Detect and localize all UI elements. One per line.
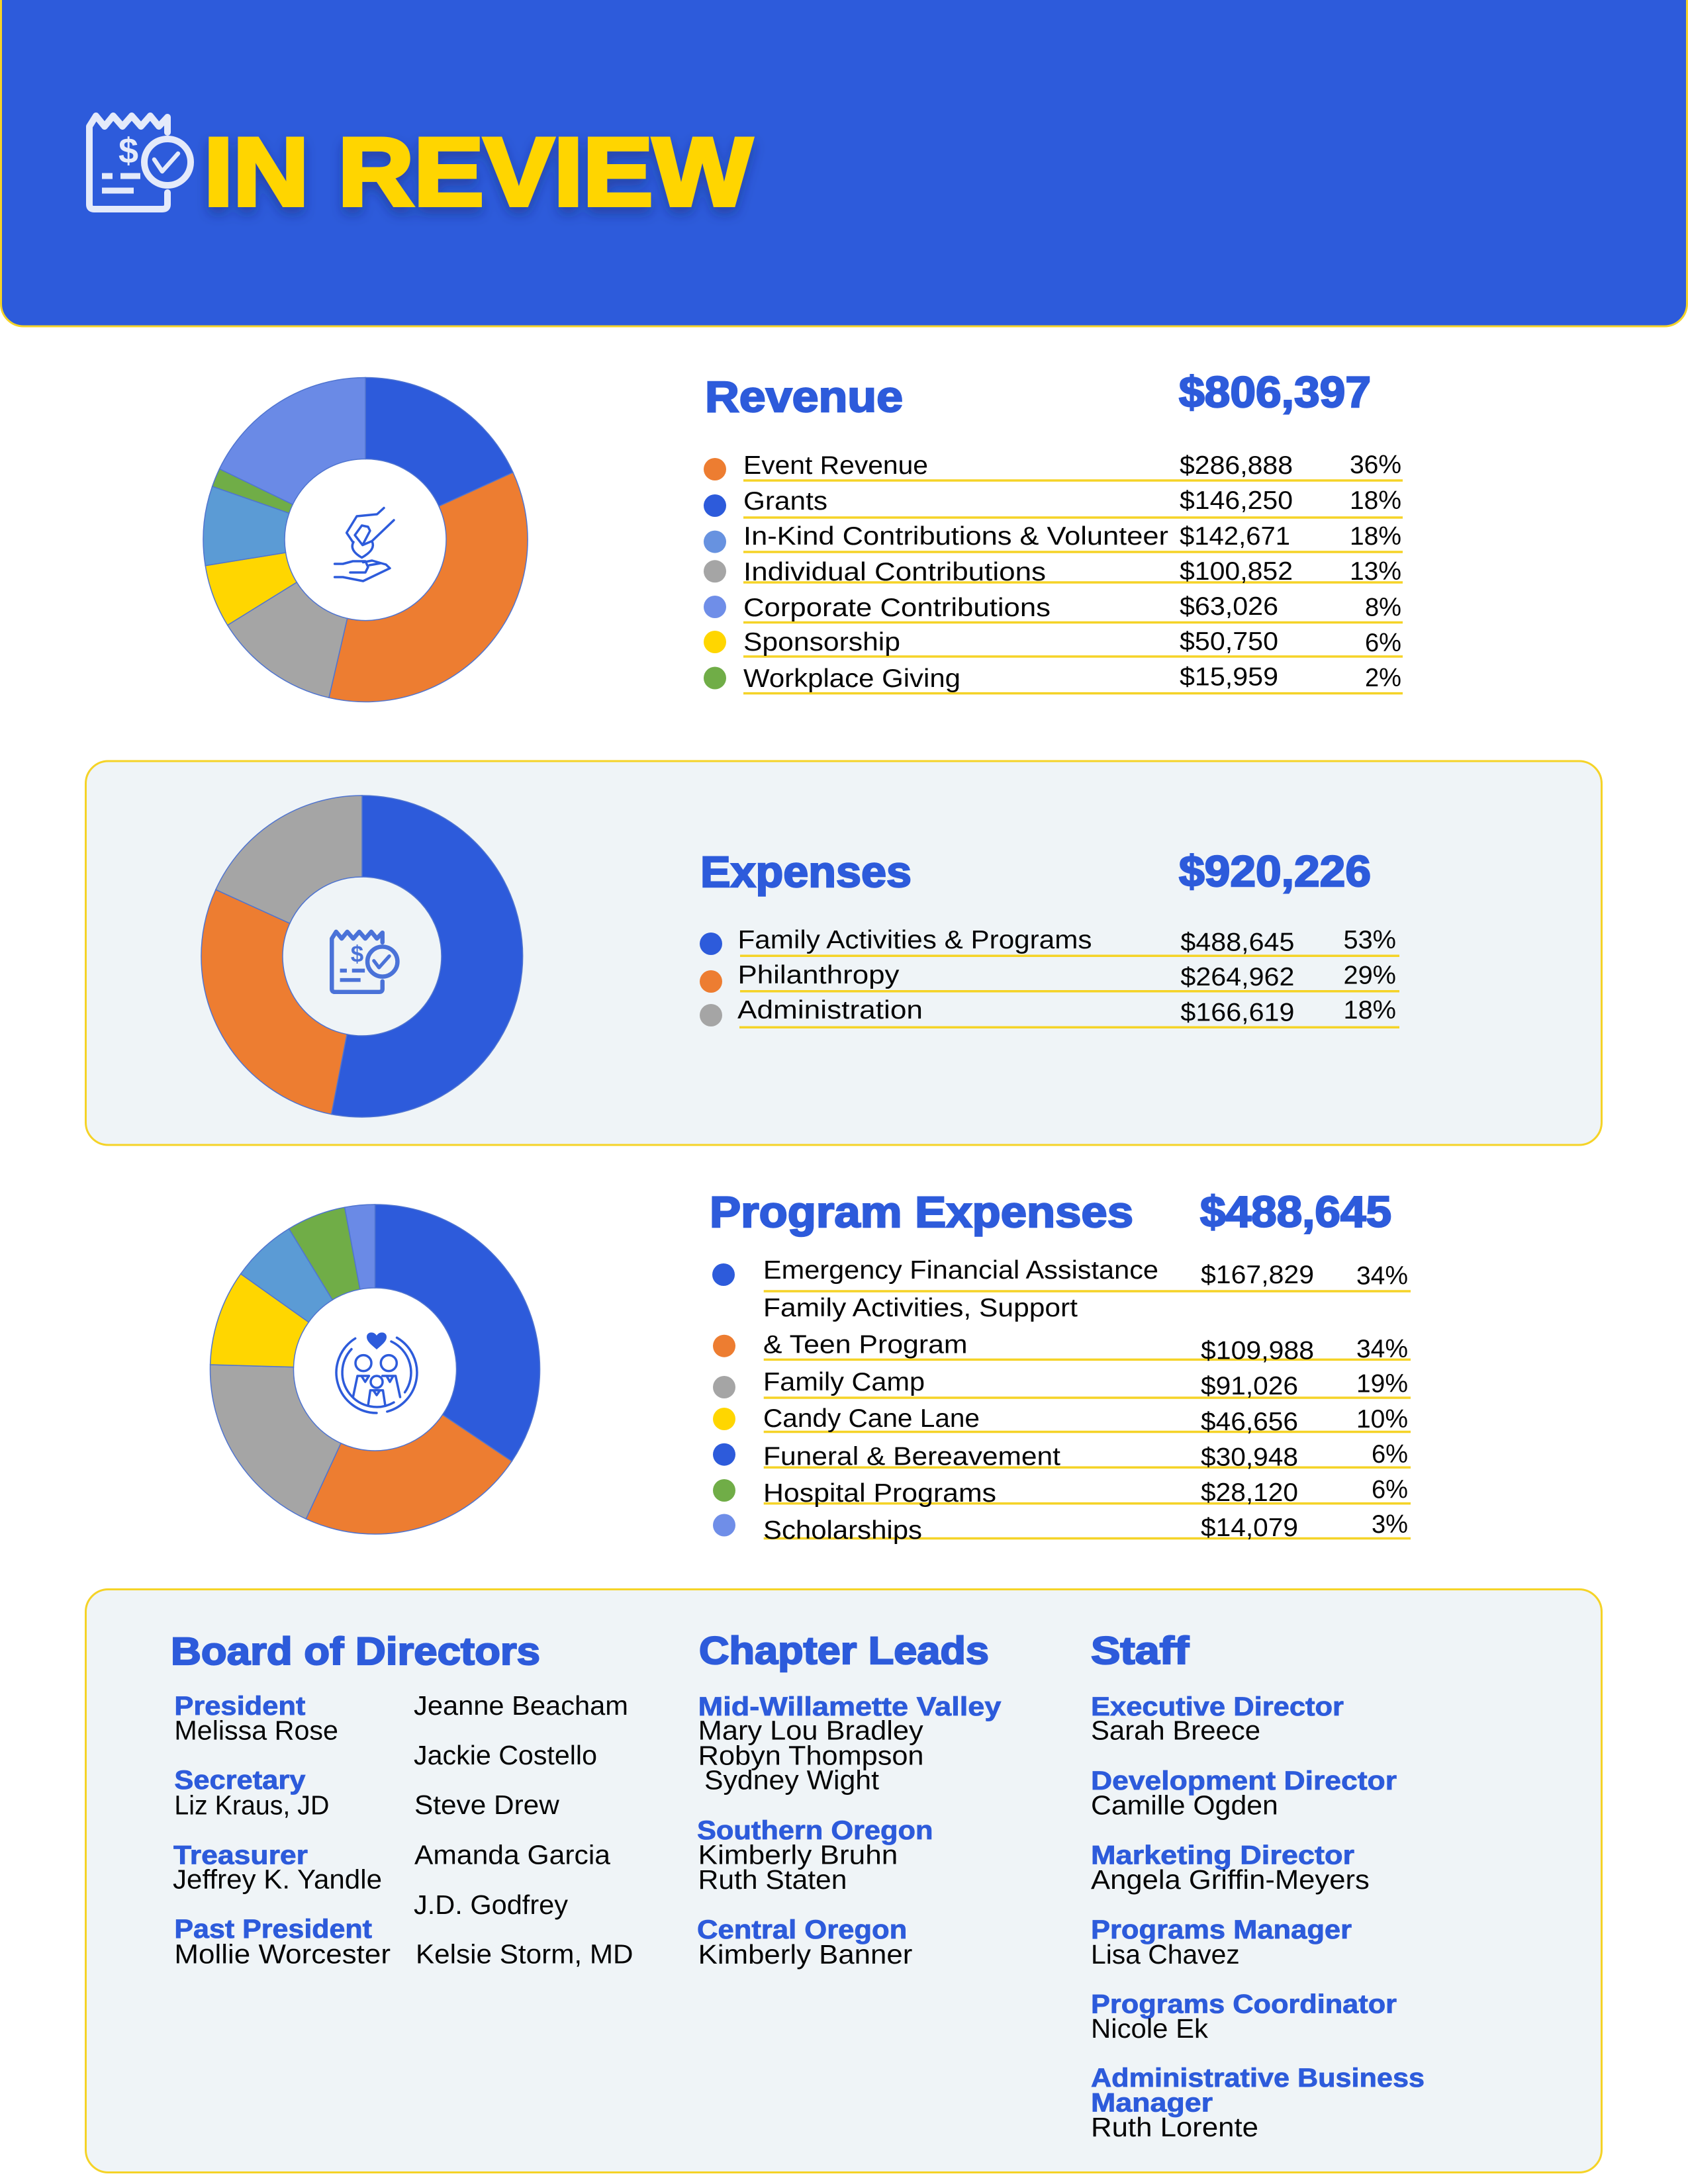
row: Grants: 18% <box>1350 486 1401 515</box>
staff: Programs Coordinator <box>1091 1990 1397 2044</box>
officer: President: Melissa Rose <box>174 1715 338 1746</box>
panel: expenses <box>86 761 1602 1145</box>
officer: Secretary: Liz Kraus, JD <box>174 1790 329 1820</box>
row: Administration: 18% <box>1344 996 1396 1024</box>
row: Administration: $166,619 <box>1180 999 1294 1027</box>
title: IN REVIEW <box>204 118 752 226</box>
row: Corporate Contributions <box>704 592 1403 622</box>
slice: Funeral & Bereavement <box>241 1229 332 1322</box>
row: Family Camp: $91,026 <box>1201 1372 1298 1400</box>
slice: Emergency Financial Assistance <box>375 1205 540 1461</box>
row: Grants: $146,250 <box>1180 486 1293 515</box>
board members list: Amanda Garcia <box>414 1839 610 1870</box>
staff: Marketing Director: Marketing Director <box>1091 1841 1354 1870</box>
icon: receipt with check: $ <box>351 942 363 968</box>
program expenses legend table <box>712 1256 1411 1545</box>
row: Funeral & Bereavement: 6% <box>1372 1440 1408 1469</box>
row: Hospital Programs: Hospital Programs <box>763 1479 996 1508</box>
staff: Administrative Business Manager: Manager <box>1091 2089 1213 2118</box>
staff: Marketing Director <box>1091 1841 1370 1895</box>
icon: receipt with check <box>332 932 397 992</box>
slice: Individual Contributions <box>228 582 348 698</box>
staff: Administrative Business Manager: Administrative Business <box>1091 2064 1425 2093</box>
row: Emergency Financial Assistance: 34% <box>1356 1262 1408 1291</box>
column: Staff <box>1091 1629 1425 2142</box>
row: Corporate Contributions: Corporate Contributions <box>743 594 1051 622</box>
row: Individual Contributions: $100,852 <box>1180 557 1293 586</box>
row: Administration <box>700 996 1399 1027</box>
row: Scholarships: Scholarships <box>763 1516 922 1545</box>
program expenses donut chart <box>211 1205 540 1534</box>
chapter: Central Oregon: Kimberly Banner <box>698 1939 912 1970</box>
row: Hospital Programs <box>713 1476 1411 1508</box>
row: Family Activities & Programs <box>700 926 1399 957</box>
staff: Development Director <box>1091 1766 1397 1820</box>
program expenses heading: Program Expenses <box>710 1187 1133 1236</box>
staff: Executive Director: Executive Director <box>1091 1692 1344 1721</box>
row: Sponsorship <box>704 627 1403 657</box>
slice: Grants <box>365 377 513 506</box>
row: Emergency Financial Assistance: $167,829 <box>1201 1261 1314 1289</box>
row: In-Kind Contributions & Volunteer: 18% <box>1350 522 1401 551</box>
row: In-Kind Contributions & Volunteer: In-Kind Contributions & Volunteer <box>743 522 1168 551</box>
chapter: Central Oregon: Central Oregon <box>697 1915 907 1944</box>
row: Philanthropy <box>700 961 1399 993</box>
slice: Hospital Programs <box>289 1207 360 1300</box>
program expenses total: $488,645 <box>1200 1187 1391 1236</box>
chapter: Southern Oregon: Kimberly Bruhn <box>698 1840 898 1870</box>
row: Philanthropy: Philanthropy <box>737 961 900 989</box>
staff: Development Director: Development Director <box>1091 1766 1397 1796</box>
row: Administration: Administration <box>737 996 923 1024</box>
officer: Treasurer: Treasurer <box>173 1841 308 1870</box>
row: Workplace Giving <box>704 663 1403 694</box>
row: Hospital Programs: $28,120 <box>1201 1479 1298 1507</box>
row: Family Activities & Programs: $488,645 <box>1180 929 1294 957</box>
row: Family Activities, Support & Teen Program <box>713 1294 1411 1365</box>
officer: Secretary <box>174 1766 329 1820</box>
header banner <box>1 0 1687 326</box>
row: Grants: Grants <box>743 487 827 516</box>
officer: Past President: Past President <box>174 1915 372 1944</box>
chapter: Southern Oregon: Ruth Staten <box>698 1864 847 1895</box>
staff: Development Director: Camille Ogden <box>1091 1790 1278 1820</box>
row: Family Activities & Programs: Family Activities & Programs <box>737 926 1092 954</box>
revenue legend table <box>704 451 1403 694</box>
staff: Executive Director <box>1091 1692 1344 1746</box>
row: Funeral & Bereavement: Funeral & Bereavement <box>763 1443 1060 1471</box>
row: Emergency Financial Assistance <box>712 1256 1411 1291</box>
staff: Programs Manager: Lisa Chavez <box>1091 1939 1240 1970</box>
officer: Treasurer: Jeffrey K. Yandle <box>173 1864 382 1894</box>
row: Individual Contributions: Individual Contributions <box>743 558 1046 586</box>
row: Event Revenue <box>704 451 1403 480</box>
row: Candy Cane Lane: Candy Cane Lane <box>763 1404 980 1433</box>
row: Individual Contributions: 13% <box>1350 557 1401 586</box>
row: Family Activities, Support & Teen Program: Family Activities, Support <box>763 1294 1078 1322</box>
slice: Corporate Contributions <box>220 377 365 504</box>
row: Scholarships <box>713 1510 1411 1545</box>
row: In-Kind Contributions & Volunteer <box>704 522 1403 553</box>
slice: Event Revenue <box>329 473 528 702</box>
staff: Administrative Business Manager <box>1091 2064 1425 2142</box>
heading: Chapter Leads: Chapter Leads <box>699 1629 989 1672</box>
revenue heading: Revenue <box>705 372 903 421</box>
row: Philanthropy: 29% <box>1344 962 1396 990</box>
row: Workplace Giving: Workplace Giving <box>743 664 961 693</box>
icon: hand giving heart <box>335 508 394 581</box>
row: In-Kind Contributions & Volunteer: $142,671 <box>1180 522 1290 551</box>
heading: Board of Directors: Board of Directors <box>171 1630 540 1673</box>
row: Candy Cane Lane <box>713 1404 1411 1436</box>
officer: President: President <box>174 1692 305 1721</box>
board members list: Kelsie Storm, MD <box>416 1938 633 1969</box>
row: Family Activities, Support & Teen Program: 34% <box>1356 1335 1408 1363</box>
column: Board of Directors <box>171 1630 633 1969</box>
row: Philanthropy: $264,962 <box>1180 963 1294 991</box>
row: Family Activities & Programs: 53% <box>1344 926 1396 954</box>
expenses donut chart <box>201 796 523 1117</box>
row: Individual Contributions <box>704 557 1403 586</box>
staff: Programs Manager <box>1091 1915 1352 1970</box>
row: Corporate Contributions: $63,026 <box>1180 592 1278 621</box>
slice: Philanthropy <box>201 889 347 1115</box>
expenses heading: Expenses <box>700 847 912 896</box>
row: Family Camp: 19% <box>1356 1370 1408 1398</box>
officer: Secretary: Secretary <box>174 1766 306 1795</box>
revenue donut chart <box>203 377 528 702</box>
row: Grants <box>704 486 1403 518</box>
board members list: Steve Drew <box>414 1790 559 1820</box>
officer: Treasurer <box>173 1841 382 1894</box>
chapter: Mid-Willamette Valley: Sydney Wight <box>704 1764 880 1795</box>
expenses total: $920,226 <box>1179 846 1371 895</box>
chapter: Southern Oregon: Southern Oregon <box>697 1816 933 1845</box>
row: Event Revenue: Event Revenue <box>743 451 928 480</box>
chapter: Mid-Willamette Valley: Robyn Thompson <box>698 1741 924 1771</box>
board members list: Jeanne Beacham <box>414 1690 628 1721</box>
row: Sponsorship: $50,750 <box>1180 627 1278 656</box>
staff: Programs Coordinator: Programs Coordinator <box>1091 1990 1397 2019</box>
board members list <box>414 1690 633 1969</box>
staff: Programs Coordinator: Nicole Ek <box>1091 2013 1209 2044</box>
row: Emergency Financial Assistance: Emergency Financial Assistance <box>763 1256 1158 1285</box>
slice: Candy Cane Lane <box>211 1274 308 1367</box>
chapter: Central Oregon <box>697 1915 912 1970</box>
icon: family with heart <box>336 1332 417 1413</box>
slice: Family Activities, Support & Teen Program <box>306 1415 512 1534</box>
slice: In-Kind Contributions <box>203 486 289 566</box>
slice: Sponsorship <box>205 553 297 625</box>
row: Funeral & Bereavement <box>713 1440 1411 1471</box>
row: Candy Cane Lane: $46,656 <box>1201 1408 1298 1436</box>
icon: receipt with check: $ <box>118 131 138 171</box>
slice: Family Activities & Programs <box>332 796 523 1117</box>
staff: Administrative Business Manager: Ruth Lorente <box>1091 2112 1258 2142</box>
heading: Staff: Staff <box>1091 1629 1190 1672</box>
chapter: Southern Oregon <box>697 1816 933 1895</box>
row: Family Camp <box>713 1368 1411 1400</box>
officer: Past President: Mollie Worcester <box>174 1938 391 1969</box>
row: Sponsorship: 6% <box>1365 629 1401 657</box>
board members list: Jackie Costello <box>414 1740 597 1770</box>
staff: Programs Manager: Programs Manager <box>1091 1915 1352 1944</box>
row: Workplace Giving: $15,959 <box>1180 663 1278 691</box>
row: Hospital Programs: 6% <box>1372 1476 1408 1504</box>
chapter: Mid-Willamette Valley: Mary Lou Bradley <box>698 1715 923 1746</box>
row: Scholarships: 3% <box>1372 1510 1408 1539</box>
row: Candy Cane Lane: 10% <box>1356 1405 1408 1433</box>
chapter: Mid-Willamette Valley: Mid-Willamette Valley <box>698 1692 1002 1721</box>
row: Funeral & Bereavement: $30,948 <box>1201 1443 1298 1471</box>
row: Family Camp: Family Camp <box>763 1368 925 1396</box>
row: Sponsorship: Sponsorship <box>743 628 900 657</box>
row: Family Activities, Support & Teen Program: $109,988 <box>1201 1336 1314 1365</box>
slice: Workplace Giving <box>212 469 293 513</box>
column: Chapter Leads <box>697 1629 1002 1970</box>
icon: receipt with check <box>89 116 191 209</box>
chapter: Mid-Willamette Valley <box>698 1692 1002 1795</box>
revenue total: $806,397 <box>1179 367 1371 416</box>
expenses legend table <box>700 926 1399 1027</box>
slice: Family Camp <box>211 1365 341 1519</box>
staff: Executive Director: Sarah Breece <box>1091 1715 1260 1746</box>
panel: people directory <box>86 1590 1602 2172</box>
row: Family Activities, Support & Teen Program: & Teen Program <box>763 1331 968 1359</box>
officer: President <box>174 1692 338 1746</box>
staff: Marketing Director: Angela Griffin-Meyers <box>1091 1864 1370 1895</box>
row: Event Revenue: $286,888 <box>1180 451 1293 480</box>
board members list: J.D. Godfrey <box>414 1889 569 1920</box>
row: Workplace Giving: 2% <box>1365 664 1401 692</box>
row: Scholarships: $14,079 <box>1201 1514 1298 1542</box>
row: Event Revenue: 36% <box>1350 451 1401 479</box>
slice: Scholarships <box>345 1205 375 1289</box>
officer: Past President <box>174 1915 391 1969</box>
row: Corporate Contributions: 8% <box>1365 593 1401 622</box>
slice: Administration <box>216 796 362 923</box>
